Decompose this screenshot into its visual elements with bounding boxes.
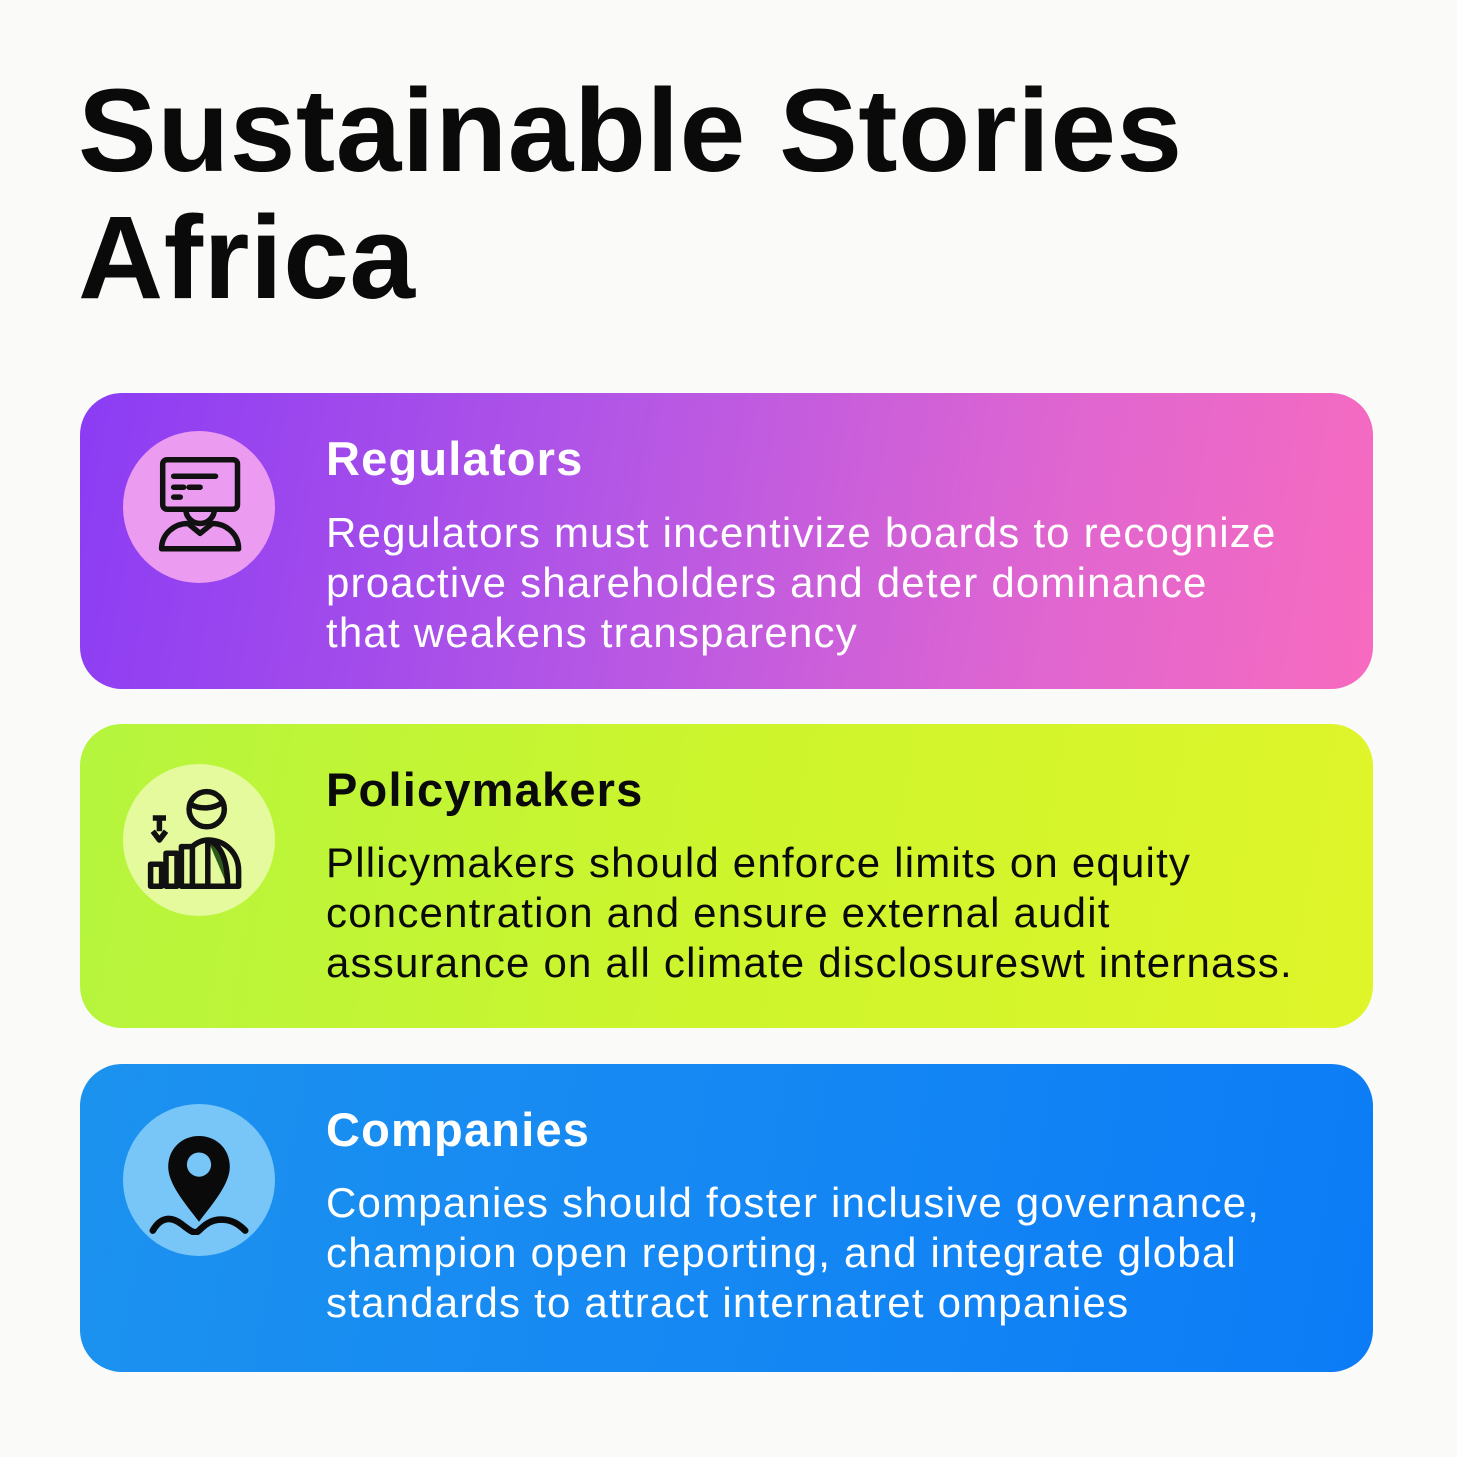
body text: proactive shareholders and deter dominance [326,559,1208,606]
body text: Regulators must incentivize boards to recognize [326,509,1277,556]
panel: regulators [80,393,1373,689]
body text [326,509,1277,656]
icon: monitor person [123,431,275,583]
body text: that weakens transparency [326,609,858,656]
body text [326,839,1293,986]
body text: Pllicymakers should enforce limits on equity [326,839,1191,886]
body text: assurance on all climate disclosureswt internass. [326,939,1293,986]
title [78,65,1183,324]
body text: standards to attract internatret ompanies [326,1279,1129,1326]
heading: Companies [326,1103,590,1156]
icon: person with chart [123,764,275,916]
heading: Policymakers [326,763,644,816]
icon: location pin [123,1104,275,1256]
body text [326,1179,1260,1326]
panel: companies [80,1064,1373,1372]
body text: champion open reporting, and integrate global [326,1229,1237,1276]
panel: policymakers [80,724,1373,1028]
body text: concentration and ensure external audit [326,889,1111,936]
title: Africa [78,192,415,324]
heading: Regulators [326,432,584,485]
title: Sustainable Stories [78,65,1183,197]
body text: Companies should foster inclusive governance, [326,1179,1260,1226]
